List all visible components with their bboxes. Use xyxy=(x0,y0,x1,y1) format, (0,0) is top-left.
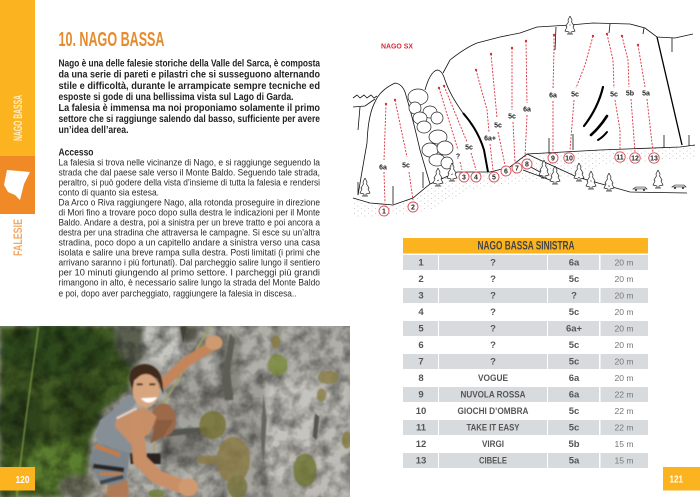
grade labels: 6a xyxy=(379,164,387,172)
table rows text: 6a+ xyxy=(566,324,583,334)
table rows text: 9 xyxy=(418,390,424,400)
table rows text: 6 xyxy=(418,340,424,351)
page number right: 121 xyxy=(663,467,700,490)
boulders between the pillars xyxy=(408,89,453,169)
sidebar label: Falesie: FALESIE xyxy=(11,219,25,256)
intro text block: La falesia è immensa ma noi proponiamo solamente il primo xyxy=(58,103,320,114)
route number circles: 1 xyxy=(382,208,386,216)
table rows text: 22 m xyxy=(614,390,634,400)
access text block: per 10 minuti giungendo al primo settore. I parcheggi più grandi xyxy=(58,268,320,279)
page number left: 120: 120 xyxy=(16,475,30,486)
table rows text: 10 xyxy=(416,406,426,417)
diagram label: NAGO SX xyxy=(381,44,413,50)
table rows text: 20 m xyxy=(614,373,634,383)
table header: NAGO BASSA SINISTRA xyxy=(478,240,574,252)
grade labels: 5c xyxy=(494,122,502,130)
table rows text: 20 m xyxy=(614,307,634,317)
access text block: Da Arco o Riva raggiungere Nago, alla rotonda proseguire in direzione xyxy=(58,198,320,209)
access text block: strada che dal paese sale verso il Monte Baldo. Seguendo tale strada, xyxy=(58,168,320,179)
table rows text: TAKE IT EASY xyxy=(466,422,520,434)
intro text block: settore che si raggiunge salendo dal basso, sufficiente per avere xyxy=(58,114,320,125)
table rows text: 11 xyxy=(416,422,427,434)
grade labels: 5c xyxy=(508,114,516,120)
access text block: rimangono in alto, è necessario salire lungo la strada del Monte Baldo xyxy=(58,278,320,289)
table rows text: 5a xyxy=(569,456,580,466)
table rows text: 1 xyxy=(418,258,424,268)
table rows text: ? xyxy=(571,290,577,302)
grade labels: 5c xyxy=(402,162,410,170)
grade labels: 5a xyxy=(642,90,650,98)
table header xyxy=(403,238,648,254)
table rows text: 8 xyxy=(418,373,424,384)
access text block: di Mori fino a trovare poco dopo sulla destra le indicazioni per il Monte xyxy=(58,208,320,219)
photo: climber on limestone rock xyxy=(0,323,351,497)
route table xyxy=(403,238,648,468)
table rows text: 5c xyxy=(569,422,579,434)
table rows text: CIBELE xyxy=(479,456,507,466)
table rows text: 6a xyxy=(569,258,580,268)
table rows text: 2 xyxy=(418,274,424,285)
table rows text: 13 xyxy=(416,456,426,466)
photo texture xyxy=(0,326,350,497)
page number left: 120 xyxy=(0,467,35,490)
route number circles: 6 xyxy=(504,168,508,176)
intro text block: esposte si gode di una bellissima vista sul Lago di Garda. xyxy=(58,92,294,103)
route number circles: 4 xyxy=(474,174,478,182)
route number circles: 5 xyxy=(492,174,496,182)
title: 10. NAGO BASSA xyxy=(58,28,165,51)
table rows text: 7 xyxy=(418,356,424,368)
green rope xyxy=(17,327,38,497)
route number circles: 13 xyxy=(650,156,658,162)
grade labels: 6a xyxy=(549,92,557,100)
table rows text: 20 m xyxy=(614,274,634,284)
sidebar label: Nago Bassa: NAGO BASSA xyxy=(11,95,25,141)
route number circles: 3 xyxy=(462,174,466,182)
table rows text: NUVOLA ROSSA xyxy=(460,390,526,400)
route number circles: 12 xyxy=(631,156,639,162)
table rows text: 22 m xyxy=(614,406,634,416)
table rows text: 22 m xyxy=(614,422,634,432)
access text block: peraltro, si può godere della vista d’insieme di tutta la falesia e rendersi xyxy=(58,178,320,189)
access heading: Accesso xyxy=(58,148,94,158)
table rows text: GIOCHI D’OMBRA xyxy=(458,406,529,417)
table rows text: 20 m xyxy=(614,356,634,366)
red climbing routes xyxy=(384,33,653,203)
access text block: conto di quanto sia estesa. xyxy=(58,188,159,199)
table rows text: 5c xyxy=(569,340,579,351)
route number circles: 2 xyxy=(411,204,415,212)
table rows text: 15 m xyxy=(614,439,634,449)
table rows text: 6a xyxy=(569,373,580,384)
grade labels: ? xyxy=(456,154,460,160)
sidebar: section tab xyxy=(0,0,35,156)
access text block: e poi, dopo aver parcheggiato, raggiungere la falesia in discesa.. xyxy=(58,289,296,300)
access text block: destra per una stradina che attraversa le campagne. Si esce su un’altra xyxy=(58,228,321,239)
table rows text: 20 m xyxy=(614,290,634,300)
route number circles: 10 xyxy=(565,156,573,162)
route number circles: 8 xyxy=(525,162,529,168)
table rows text: 5c xyxy=(569,307,579,318)
route number circles: 9 xyxy=(551,156,555,162)
grade labels xyxy=(379,90,650,172)
table row stripes xyxy=(403,255,648,468)
table rows text: 5 xyxy=(418,324,424,334)
access text block: Baldo. Andare a destra, poi a sinistra per un breve tratto e poi ancora a xyxy=(58,218,321,229)
table rows text: ? xyxy=(490,290,496,302)
intro text block xyxy=(58,58,320,136)
grade labels: 5c xyxy=(610,92,618,98)
table rows text: 5c xyxy=(569,274,579,285)
grade labels: 6a xyxy=(523,106,531,114)
table rows text: ? xyxy=(490,307,496,318)
intro text block: da una serie di pareti e pilastri che si susseguono alternando xyxy=(58,70,320,81)
access text block: isolata e salire una breve rampa sulla destra. Posti limitati (i primi che xyxy=(58,248,320,259)
table rows text: ? xyxy=(490,356,496,368)
table rows text: ? xyxy=(490,258,496,268)
route number circles: 11 xyxy=(616,154,624,162)
table rows text: 5b xyxy=(568,439,580,450)
grade labels: 5c xyxy=(571,92,579,98)
table rows text: ? xyxy=(490,324,496,334)
table rows text xyxy=(416,258,634,466)
intro text block: Nago è una delle falesie storiche della Valle del Sarca, è composta xyxy=(58,58,320,70)
access text block xyxy=(58,158,321,300)
table rows text: VIRGI xyxy=(482,439,504,450)
table rows text: VOGUE xyxy=(478,373,508,384)
table rows text: 6a xyxy=(569,390,580,400)
table rows text: 12 xyxy=(416,439,426,450)
table rows text: 5c xyxy=(569,356,579,368)
grade labels: 6a+ xyxy=(484,136,496,142)
table rows text: ? xyxy=(490,340,496,351)
table rows text: 20 m xyxy=(614,324,634,334)
table rows text: 3 xyxy=(418,290,424,302)
access text block: La falesia si trova nelle vicinanze di Nago, e si raggiunge seguendo la xyxy=(58,158,321,168)
access text block: stradina, poco dopo a un capitello andare a sinistra verso una casa xyxy=(58,238,321,249)
intro text block: stile e difficoltà, durante le arrampicate sempre tecniche ed xyxy=(58,81,320,92)
route number circles xyxy=(379,152,659,216)
grade labels: 5b xyxy=(626,90,634,98)
table rows text: 15 m xyxy=(614,456,634,466)
access text block: arrivano saranno i più fortunati). Dal parcheggio salire lungo il sentiero xyxy=(58,258,320,269)
route number circles: 7 xyxy=(515,166,519,172)
black streaks on the wall xyxy=(584,87,607,140)
table rows text: ? xyxy=(490,274,496,285)
intro text block: un’idea dell’area. xyxy=(58,125,129,136)
table rows text: 4 xyxy=(418,307,424,318)
crag topo diagram: Nago SX xyxy=(353,16,695,218)
table rows text: 5c xyxy=(569,406,579,417)
trees and cars xyxy=(360,16,686,196)
page number right: 121: 121 xyxy=(670,474,683,486)
sidebar icon tab: cliff xyxy=(0,156,35,214)
table rows text: 20 m xyxy=(614,258,634,268)
grade labels: 5c xyxy=(465,144,473,152)
table rows text: 20 m xyxy=(614,340,634,350)
